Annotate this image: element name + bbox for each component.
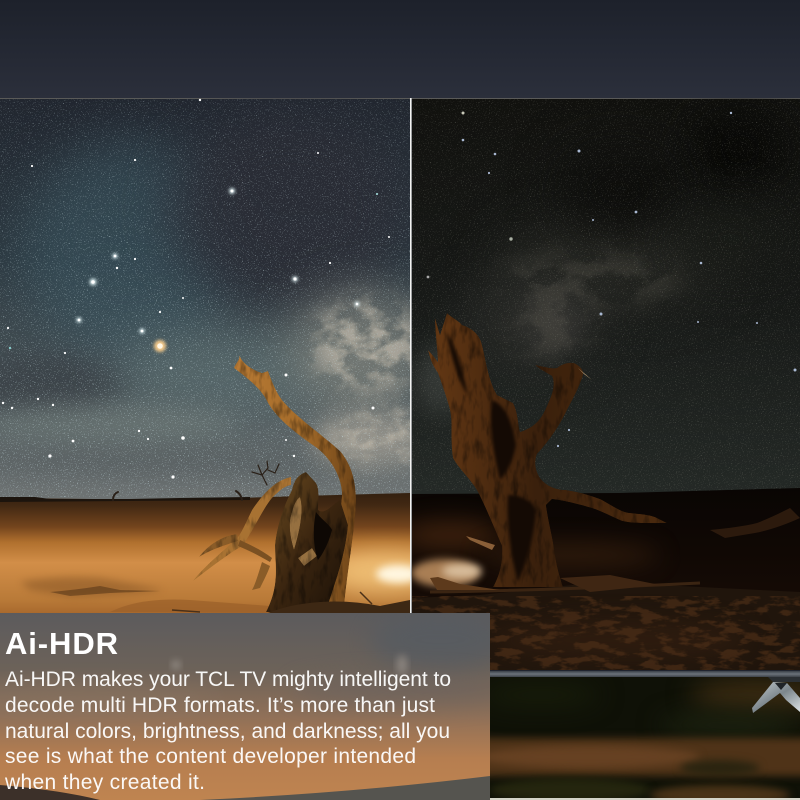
heading: Ai-HDR: [5, 626, 118, 661]
left foreground debris: [172, 592, 410, 613]
distant dead trees: [113, 461, 279, 500]
right dark ground: [400, 488, 800, 670]
left foreground branch: [234, 353, 356, 607]
icon: tv stand: [752, 677, 800, 713]
panel: Ai-HDR text box: [0, 610, 510, 800]
right dead tree: [428, 313, 667, 587]
top dark band: [0, 0, 800, 99]
divider line: [410, 98, 412, 613]
right sky: [412, 99, 800, 495]
panel: left photo, bright Ai-HDR night desert: [0, 99, 445, 613]
body text: see is what the content developer intended: [5, 745, 416, 768]
body text: natural colors, brightness, and darkness; all you: [5, 720, 450, 743]
left desert ground: [0, 493, 445, 613]
text box blurred backdrop: [0, 610, 510, 800]
right fallen branches: [430, 508, 800, 592]
left stump: [193, 472, 348, 612]
body text: decode multi HDR formats. It’s more than just: [5, 694, 435, 717]
bottom right blurred reflection: [480, 677, 800, 800]
body text: when they created it.: [4, 771, 205, 794]
panel: right photo, dim comparison: [400, 99, 800, 670]
body text: Ai-HDR makes your TCL TV mighty intelligent to: [5, 668, 451, 691]
body text: [4, 668, 451, 794]
left bright stars: [2, 99, 390, 479]
tv bottom bar: [490, 671, 800, 677]
left sky: [0, 99, 430, 499]
right stars: [427, 112, 796, 447]
bottom edge line: [490, 798, 800, 800]
left star speckle: [0, 99, 410, 497]
right star speckle: [412, 99, 800, 491]
